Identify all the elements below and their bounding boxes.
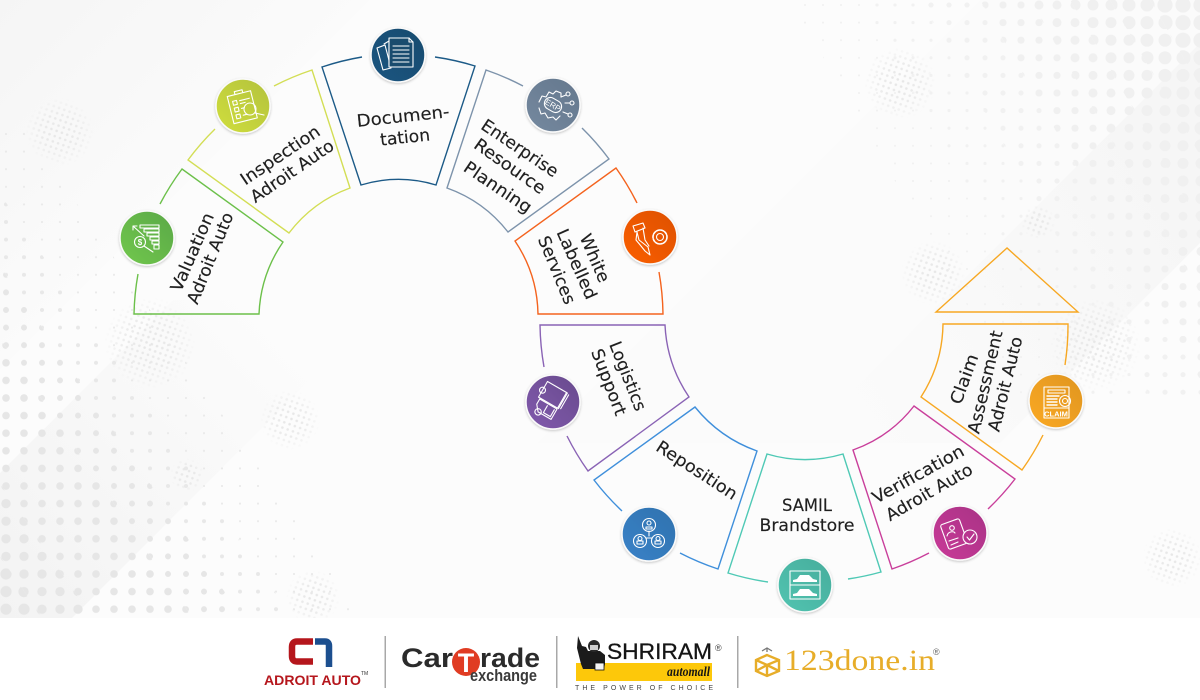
logo: CarTrade exchange [401,643,540,685]
icon: claim form [1029,374,1083,428]
logo: Shriram Automall [575,636,722,692]
label: Valuation [167,210,219,295]
label: Logistics [604,339,650,414]
logo: CarTrade exchange: exchange [470,666,537,685]
label line 3: Services [533,233,579,308]
panel: Reposition [594,407,757,569]
icon: pen nib and gear [623,210,677,264]
label line 2: Brandstore [760,516,854,536]
panel: Valuation Adroit Auto [120,169,283,314]
panel: Logistics Support [526,325,689,471]
icon: connected people [622,507,676,561]
label line 2: Support [586,346,630,419]
label: Verification [869,441,968,508]
logo: Adroit Auto: ADROIT AUTO [264,672,361,688]
label: Inspection [237,122,324,190]
label line 2: Assessment [964,328,1008,436]
label: White [575,231,613,286]
panel outline [921,324,1068,470]
panel outline [188,70,350,233]
label line 2: Adroit Auto [247,136,338,208]
panel outline [728,454,881,582]
panel: Documentation [322,28,475,185]
panel outline [322,57,475,185]
logo: CarTrade exchange: Car [401,643,454,673]
icon: cars in storage [778,558,832,612]
label line 2: tation [379,125,431,151]
label: Reposition [652,437,741,505]
label: Documen- [356,102,450,132]
panel outline [515,168,663,314]
panel outline [134,169,283,314]
logo: Adroit Auto: TM [361,671,368,677]
divider [384,636,386,688]
label line 2: Adroit Auto [882,460,977,526]
logo: CarTrade exchange: T [458,648,475,678]
icon: ERP gear: ERP [543,97,562,113]
label: Enterprise [477,116,562,182]
icon: documents [371,28,425,82]
logo: Adroit Auto [264,642,368,688]
panel outline [853,406,1015,569]
arrow head [936,248,1078,312]
icon: delivery truck [526,375,580,429]
icon: ERP gear [526,78,580,132]
icon: claim form: CLAIM [1044,410,1068,418]
panel: Inspection Adroit Auto [188,70,350,233]
logo: 123done.in: ® [933,647,940,657]
icon: valuation chart [120,211,174,265]
logo: Shriram Automall: ® [715,643,722,653]
panel outline [594,407,757,569]
panel outline [447,70,609,232]
panel: Enterprise Resource Planning [447,70,609,232]
logo: CarTrade exchange: rade [480,643,540,673]
panel: SAMIL Brandstore [728,454,881,612]
logo: Shriram Automall: THE POWER OF CHOICE [575,685,713,692]
logo: Shriram Automall: automall [667,665,710,680]
panel: White Labelled Services [515,168,677,314]
logo: Shriram Automall: SHRIRAM [607,639,712,664]
logo strip [0,618,1200,700]
label line 2: Labelled [552,226,600,303]
panel outline [540,325,689,471]
label line 3: Adroit Auto [985,335,1027,434]
divider [556,636,558,688]
icon: clipboard inspection [216,79,270,133]
panel: Verification Adroit Auto [853,406,1015,569]
icon: valuation chart: $ [138,238,143,247]
label line 2: Adroit Auto [183,210,238,307]
label: SAMIL [782,496,833,516]
label: Claim [947,351,983,407]
label line 3: Planning [460,158,535,218]
panel: Claim Assessment Adroit Auto [921,324,1083,470]
divider [737,636,738,688]
logo: 123done.in: 123done.in [784,644,935,677]
label line 2: Resource [470,135,549,199]
icon: ID verification [933,506,987,560]
